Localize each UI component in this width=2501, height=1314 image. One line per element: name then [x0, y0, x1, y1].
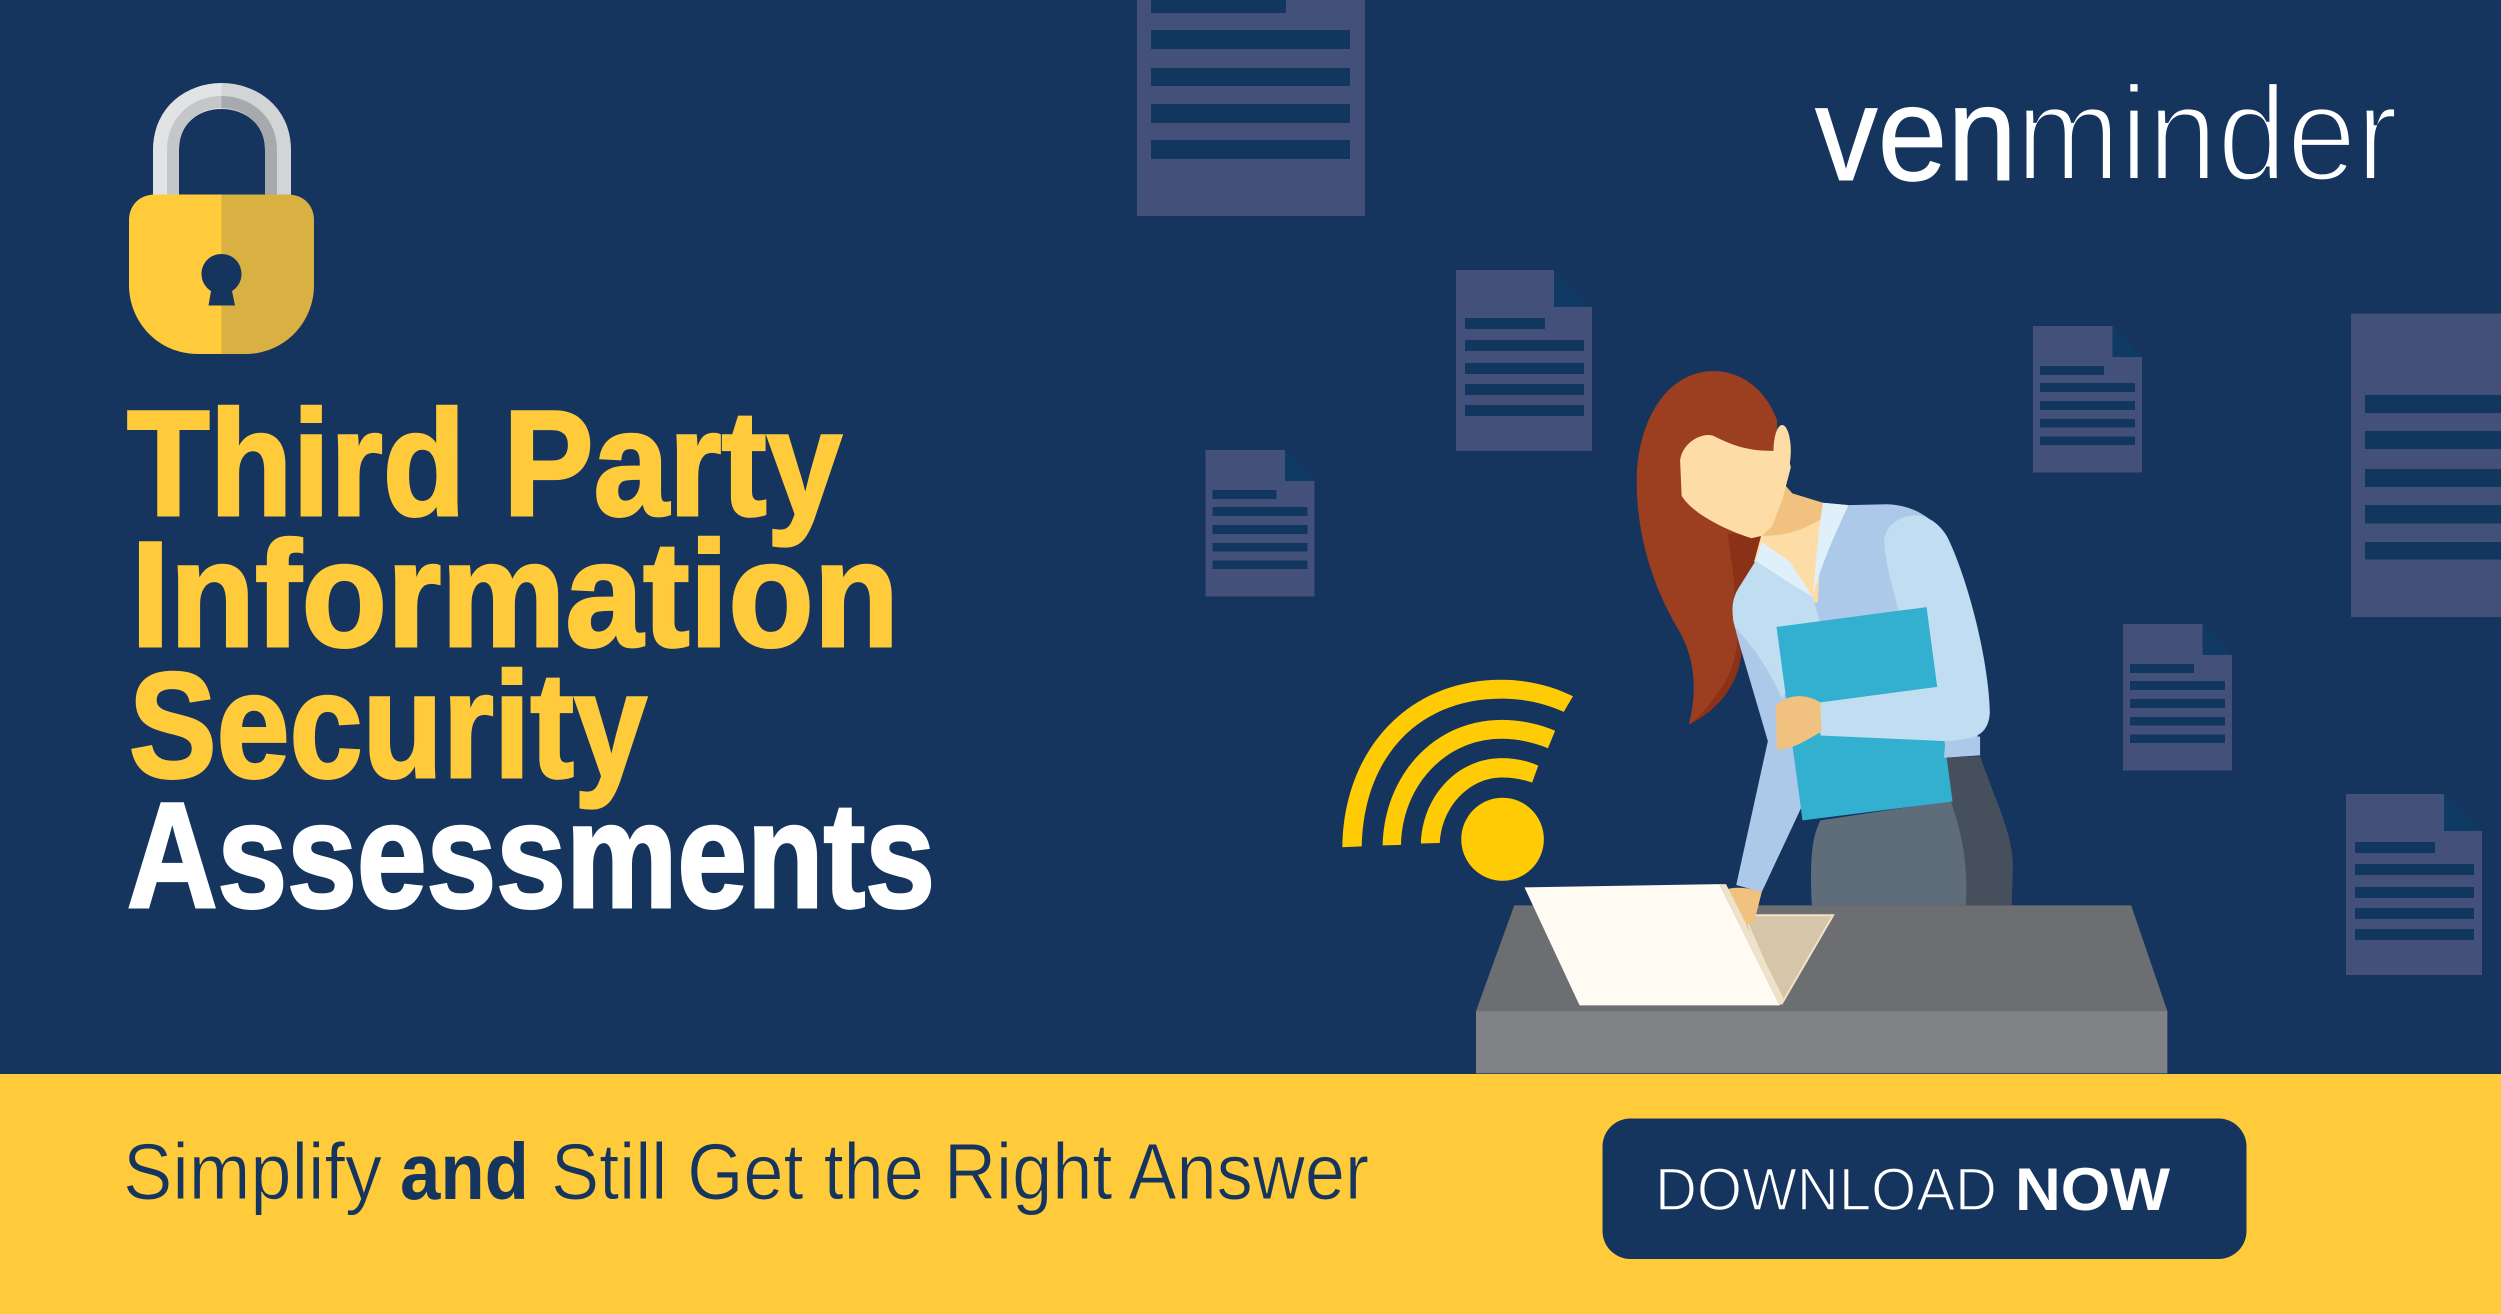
logo: venminder [1815, 58, 2398, 209]
document: top centre [1137, 0, 1365, 216]
title line: Third Party: Third Party [127, 379, 842, 547]
tagline: Simplify [123, 1127, 382, 1216]
forearm [1820, 623, 1990, 741]
collar [1756, 542, 1813, 597]
tagline: and [400, 1127, 529, 1216]
document: bottom right [2346, 794, 2482, 975]
hair [1637, 371, 1777, 725]
button: download now [1602, 1118, 2246, 1259]
title line: Information: Information [131, 510, 899, 678]
icon: padlock [129, 96, 314, 354]
logo: venminder: minder [2016, 58, 2398, 209]
icon: wifi signal [1342, 680, 1573, 881]
document: centre [1456, 270, 1592, 451]
logo: venminder: ven [1815, 58, 2017, 209]
illustration: woman at laptop with wifi [1342, 371, 2167, 1073]
document: left small [1206, 450, 1314, 596]
ear [1773, 425, 1791, 477]
hand on folder [1776, 696, 1821, 750]
document: right small upper [2033, 326, 2142, 472]
tagline: Still Get the Right Answer [551, 1127, 1369, 1216]
woman [1637, 371, 2013, 905]
upper arm [1884, 515, 1990, 718]
title [127, 379, 935, 939]
button: download now: DOWNLOAD [1655, 1156, 1997, 1223]
skirt [1811, 800, 1968, 905]
button: download now: NOW [2015, 1156, 2170, 1223]
document: right small lower [2123, 624, 2232, 770]
title line: Security: Security [129, 641, 647, 809]
torso [1810, 503, 1980, 765]
document: right edge large [2351, 314, 2501, 617]
desk [1476, 905, 2167, 1073]
footer band [0, 1074, 2501, 1314]
title line: Assessments: Assessments [127, 771, 935, 939]
laptop [1524, 884, 1833, 1005]
tagline [123, 1127, 1369, 1216]
folder [1777, 607, 1953, 820]
face [1680, 435, 1791, 538]
neck [1754, 503, 1823, 604]
near arm reaching to laptop [1733, 618, 1810, 892]
